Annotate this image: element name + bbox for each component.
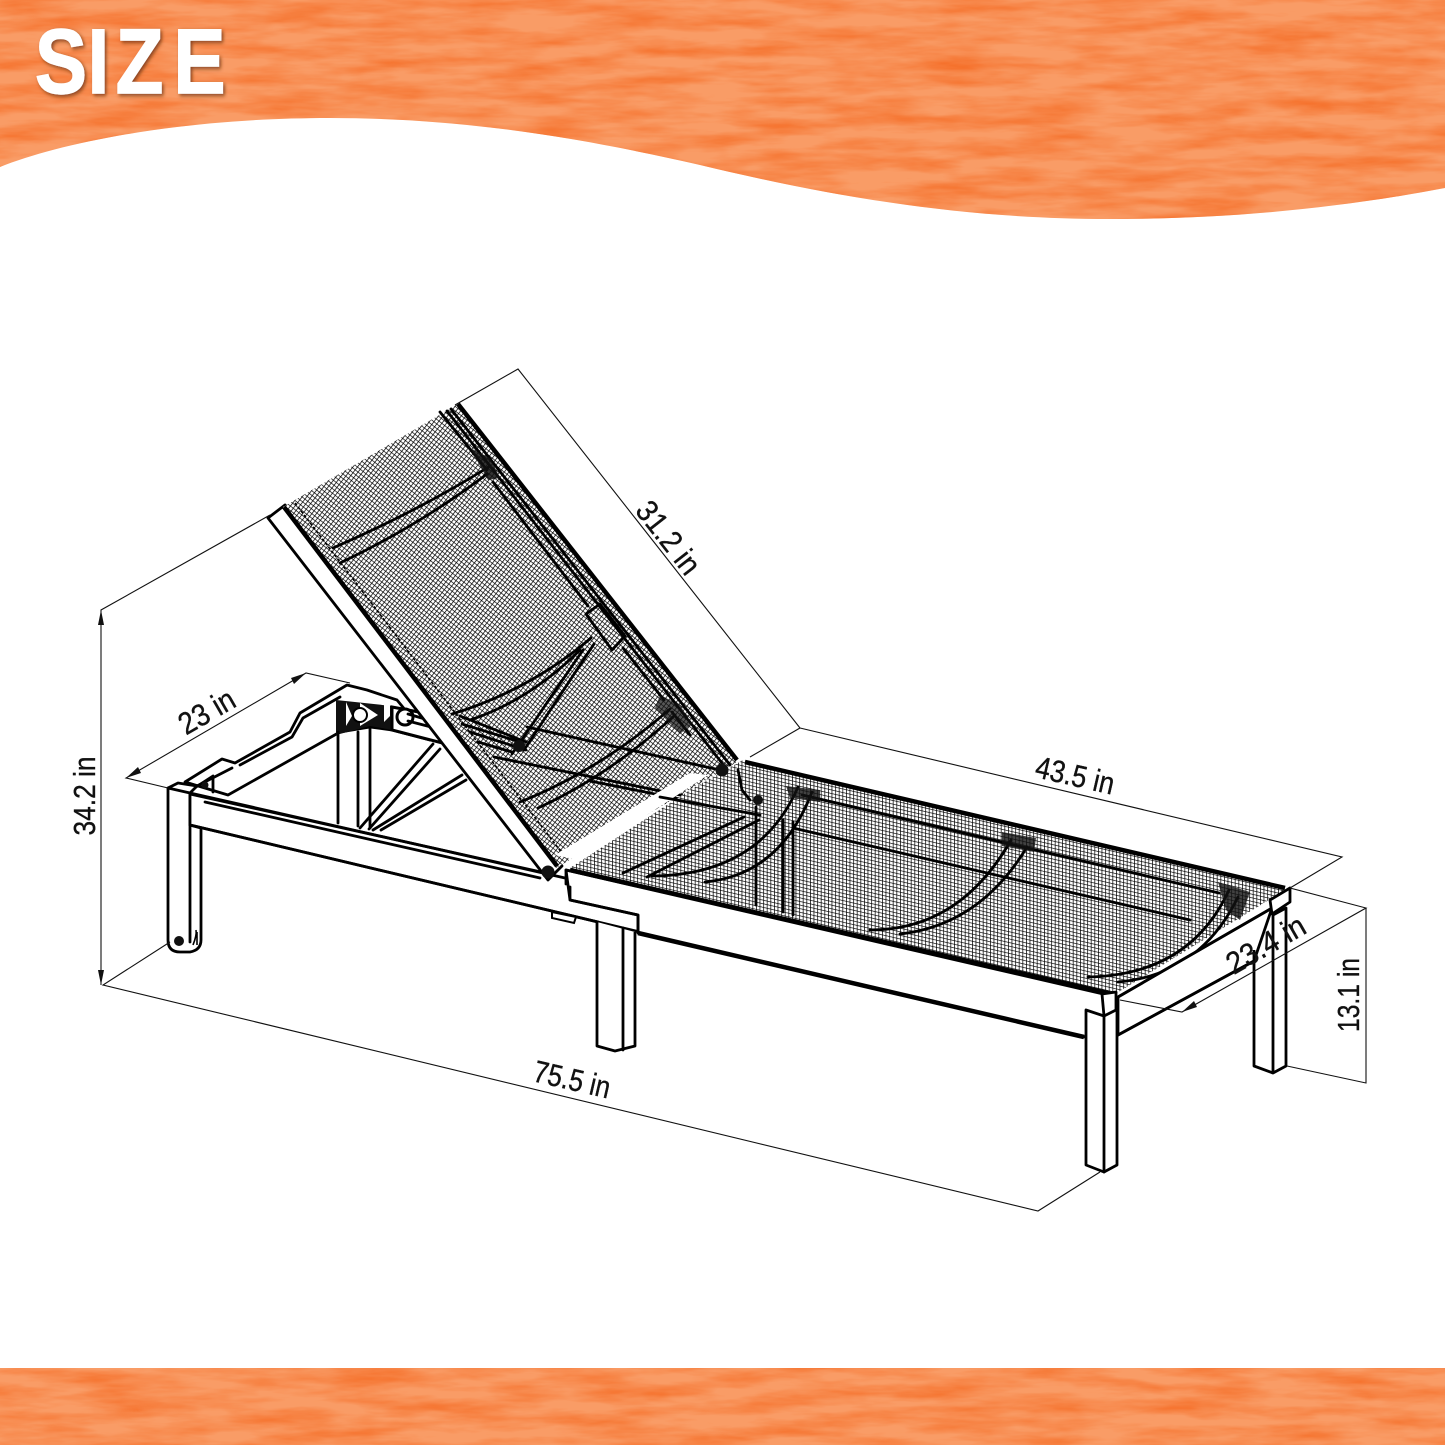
dimension: overall height 34.2 in	[67, 515, 270, 985]
far foot leg	[1254, 888, 1290, 1073]
head-end caster leg	[168, 783, 201, 952]
dimension: seat height 13.1 in	[1287, 908, 1366, 1083]
seat rods	[793, 795, 1219, 920]
backrest outer white strip	[268, 505, 562, 880]
seat mesh	[570, 760, 1285, 996]
backrest cross rods	[494, 727, 760, 815]
diagonal braces	[360, 744, 466, 830]
dimension: overall length 75.5 in	[103, 942, 1100, 1211]
left side rail	[190, 793, 640, 932]
backrest	[268, 404, 760, 880]
dimension: overall length 75.5 in: 75.5 in	[530, 1054, 614, 1105]
dimension: backrest length 31.2 in	[455, 369, 800, 757]
support post	[338, 728, 370, 828]
pivot joints	[716, 764, 728, 776]
dimension: seat width 23.4 in: 23.4 in	[1220, 908, 1312, 981]
side rail of seat	[552, 870, 1118, 1037]
dimension: seat height 13.1 in: 13.1 in	[1331, 958, 1366, 1032]
title: SIZE	[35, 11, 226, 113]
gap strip between back and seat	[555, 773, 708, 860]
seat	[542, 760, 1285, 996]
dimension: head width 23 in: 23 in	[172, 681, 241, 742]
backrest lower curved band	[520, 648, 690, 808]
dimension: backrest length 31.2 in: 31.2 in	[629, 494, 708, 582]
bottom orange wood-texture band	[0, 1368, 1445, 1445]
dimension: seat length 43.5 in	[800, 728, 1342, 888]
foot-end cross rail	[1118, 908, 1272, 1035]
head-end crossbar bracket	[336, 700, 392, 735]
backrest mesh	[283, 404, 737, 868]
seat curved bands	[623, 787, 812, 882]
dimension: overall height 34.2 in: 34.2 in	[67, 756, 102, 836]
small corner bracket	[196, 776, 213, 792]
near foot leg	[1086, 992, 1117, 1172]
dimension: seat width 23.4 in	[1120, 888, 1366, 1012]
middle leg	[597, 922, 635, 1051]
dimension: head width 23 in	[126, 673, 350, 788]
backrest upper bracket	[470, 448, 500, 480]
backrest struts	[452, 638, 594, 754]
top orange wood-texture banner	[0, 0, 1445, 225]
backrest upper curved band	[333, 466, 490, 563]
chaise lounge line drawing	[168, 404, 1290, 1172]
seat brackets	[786, 786, 1250, 920]
dimension: seat length 43.5 in: 43.5 in	[1032, 749, 1118, 802]
head-end frame and support	[185, 685, 466, 830]
